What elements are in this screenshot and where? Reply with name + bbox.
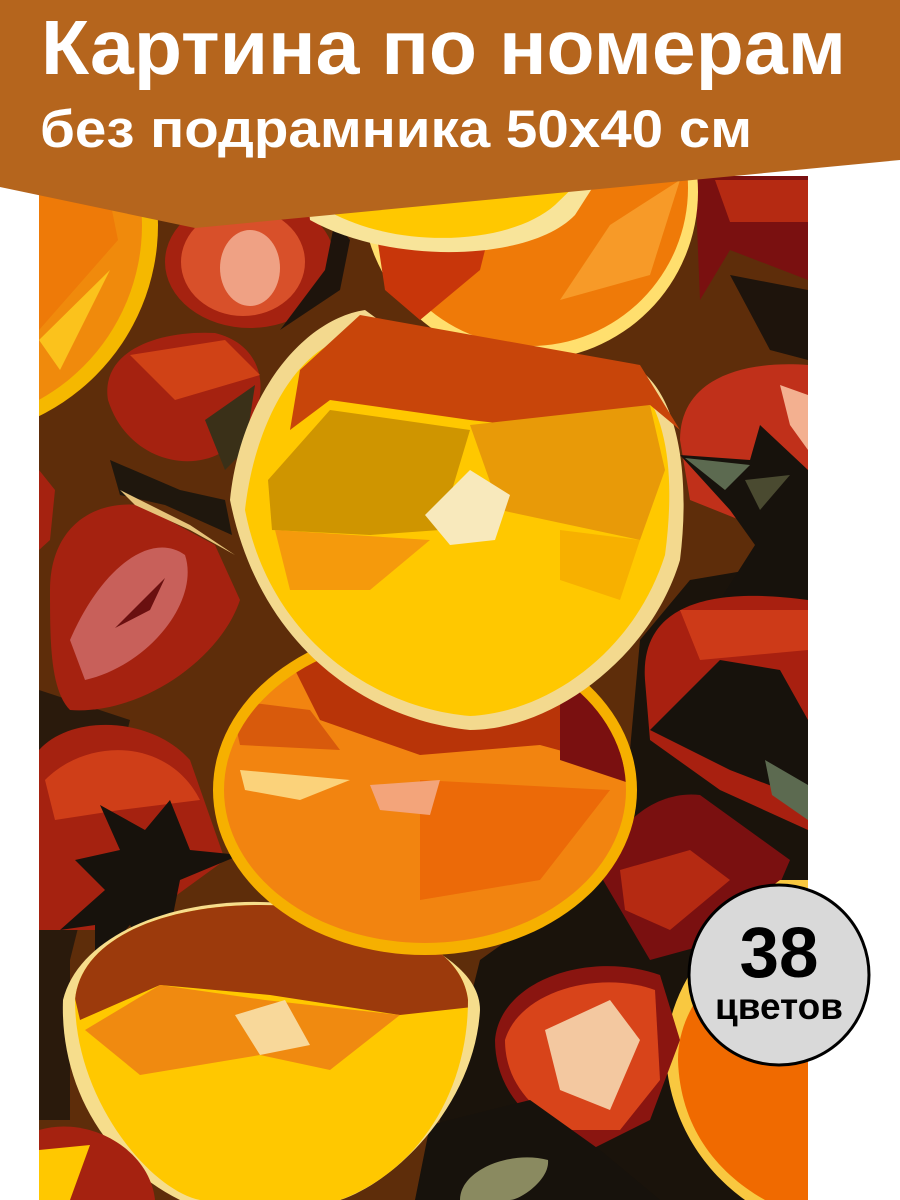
badge label: цветов bbox=[715, 986, 843, 1027]
subtitle: без подрамника 50х40 см bbox=[40, 100, 752, 159]
bottom middle strawberry bbox=[495, 966, 680, 1150]
badge: 38 colours bbox=[689, 885, 869, 1065]
dark lower-right background bbox=[420, 560, 808, 1200]
lower-right strawberry bbox=[603, 794, 790, 960]
top strawberry bbox=[165, 217, 350, 330]
painting: oranges and strawberries bbox=[39, 176, 808, 1200]
badge number: 38 bbox=[740, 914, 818, 993]
left strawberry bbox=[107, 333, 261, 535]
lower central orange slice bbox=[213, 652, 637, 955]
left middle strawberry bbox=[39, 470, 240, 710]
central orange slice bbox=[230, 310, 684, 730]
top-left orange slice bbox=[39, 195, 158, 416]
bottom-right orange bbox=[666, 880, 808, 1200]
top-right strawberry bbox=[695, 176, 808, 360]
bottom-left orange slice bbox=[50, 890, 490, 1200]
lower-left strawberry bbox=[39, 725, 240, 965]
bottom leaves bbox=[415, 1100, 596, 1200]
bottom-left corner slice bbox=[39, 1126, 155, 1200]
right strawberries bbox=[680, 364, 808, 572]
banner bbox=[0, 0, 900, 228]
top orange slices bbox=[310, 180, 698, 354]
title: Картина по номерам bbox=[41, 5, 846, 91]
